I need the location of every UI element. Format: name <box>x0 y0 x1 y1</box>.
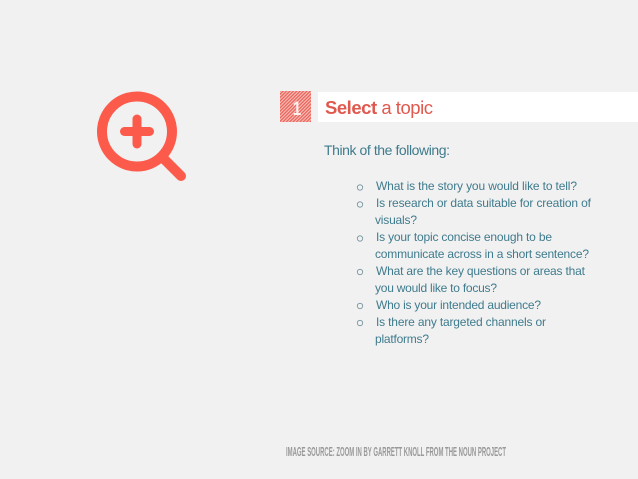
item: channels <box>375 315 546 346</box>
item: channels: Is there any targeted channels or <box>376 315 546 329</box>
item: audience: Who is your intended audience? <box>376 298 541 312</box>
item: key questions: What are the key questions or areas that <box>376 264 586 278</box>
heading bar: Select a topic <box>318 92 638 122</box>
intro text: Think of the following: <box>324 142 450 158</box>
step number badge: 1 <box>293 97 302 119</box>
item: concise topic <box>375 230 589 261</box>
item: concise topic: communicate across in a short sentence? <box>375 247 589 261</box>
item: key questions: you would like to focus? <box>375 281 497 295</box>
item: research or data: visuals? <box>375 213 417 227</box>
item: channels: platforms? <box>375 332 429 346</box>
item: key questions <box>375 264 586 295</box>
question list <box>357 179 592 346</box>
step number badge <box>280 91 311 122</box>
icon: magnifying glass with plus <box>102 96 181 176</box>
item: concise topic: Is your topic concise enough to be <box>376 230 552 244</box>
item: research or data: Is research or data suitable for creation of <box>376 196 592 210</box>
item: story: What is the story you would like to tell? <box>376 179 577 193</box>
heading bar: Select a topic: Select a topic <box>325 97 433 118</box>
bullet markers <box>357 185 363 326</box>
item: research or data <box>375 196 592 227</box>
